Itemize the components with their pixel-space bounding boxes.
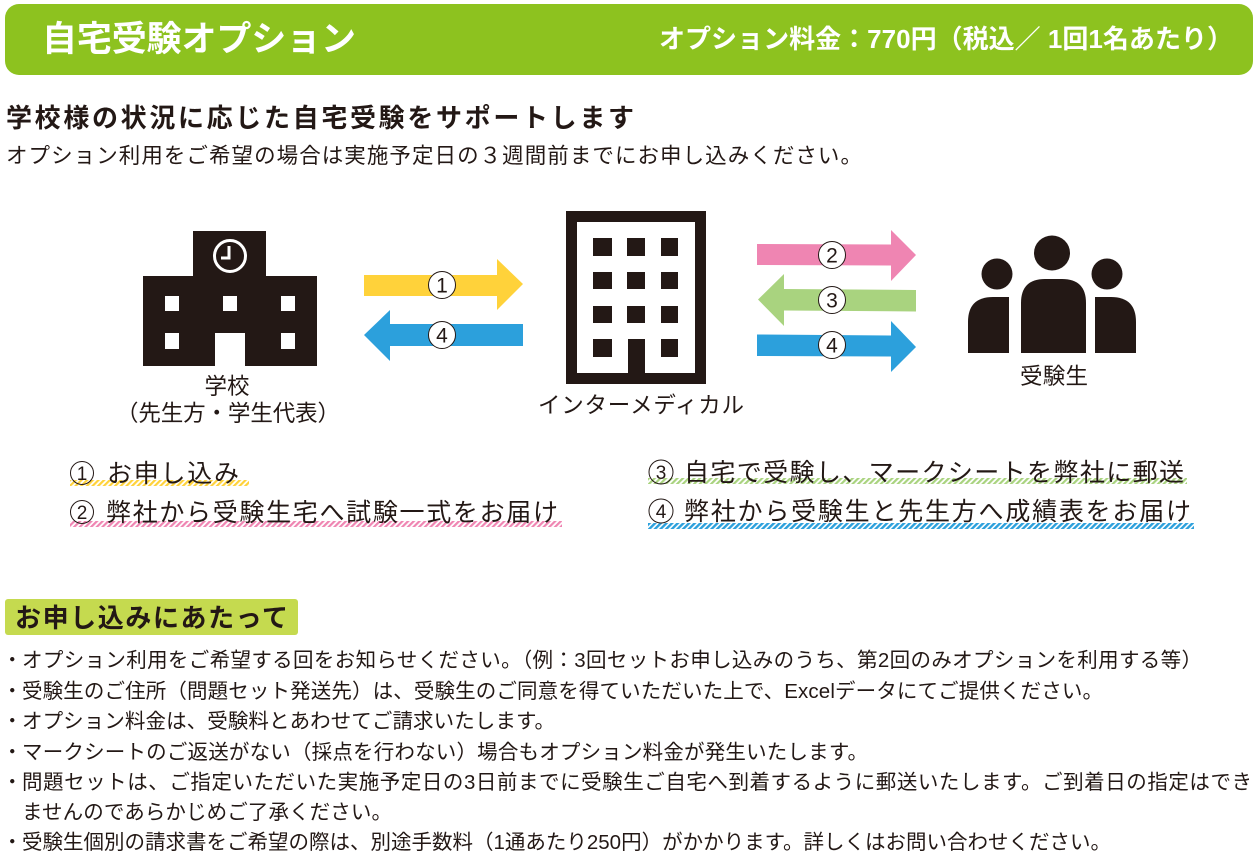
notes list: ・ — [2, 831, 22, 854]
notes list: ・ — [2, 741, 22, 764]
notes list — [2, 649, 1252, 854]
notes list: 受験生のご住所（問題セット発送先）は、受験生のご同意を得ていただいた上で、Excelデータにてご提供ください。 — [22, 680, 1103, 703]
arrow 4: Intermedical to examinees: 4 — [826, 334, 838, 358]
icon: Intermedical building — [566, 211, 706, 384]
legend: step 1: お申し込み — [107, 460, 239, 488]
notes list: ・ — [2, 649, 22, 672]
option fee: オプション料金：770円（税込／ 1回1名あたり） — [659, 24, 1233, 54]
legend: step 2: 弊社から受験生宅へ試験一式をお届け — [106, 499, 558, 527]
subheading: オプション利用をご希望の場合は実施予定日の３週間前までにお申し込みください。 — [6, 144, 862, 168]
section heading: application notes: お申し込みにあたって — [15, 603, 288, 633]
legend: step 1: 1 — [77, 464, 87, 485]
arrow 1: school to Intermedical — [364, 259, 523, 310]
label: teachers and student representative: （先生方・学生代表） — [116, 401, 340, 426]
notes list: ・ — [2, 680, 22, 703]
notes list: ・ — [2, 771, 22, 794]
arrow 4: Intermedical to examinees — [757, 321, 916, 372]
arrow 2: Intermedical to examinees — [757, 230, 916, 281]
arrow 4: Intermedical to school — [364, 310, 523, 361]
notes list: ・ — [2, 710, 22, 733]
legend: step 3: 3 — [656, 463, 666, 484]
arrow 4: Intermedical to school: 4 — [436, 324, 448, 348]
icon: school — [143, 231, 317, 366]
notes list: ませんのであらかじめご了承ください。 — [22, 801, 392, 824]
icon: examinees — [968, 236, 1136, 353]
arrow 3: examinees to Intermedical — [758, 274, 916, 326]
legend: step 4: 4 — [656, 502, 667, 523]
notes list: 問題セットは、ご指定いただいた実施予定日の3日前までに受験生ご自宅へ到着するように郵送いたします。ご到着日の指定はでき — [22, 771, 1252, 794]
arrow 2: Intermedical to examinees: 2 — [826, 244, 838, 268]
notes list: オプション料金は、受験料とあわせてご請求いたします。 — [22, 710, 555, 733]
label: Intermedical: インターメディカル — [538, 393, 744, 418]
header banner — [5, 4, 1253, 75]
label: school: 学校 — [204, 374, 250, 399]
notes list: マークシートのご返送がない（採点を行わない）場合もオプション料金が発生いたします。 — [22, 741, 868, 764]
title: 自宅受験オプション — [42, 20, 356, 59]
legend: step 2: 2 — [77, 503, 87, 524]
notes list: オプション利用をご希望する回をお知らせください。（例：3回セットお申し込みのうち、第2回のみオプションを利用する等） — [22, 649, 1202, 672]
heading: 学校様の状況に応じた自宅受験をサポートします — [6, 103, 634, 133]
arrow 1: school to Intermedical: 1 — [436, 274, 448, 298]
notes list: 受験生個別の請求書をご希望の際は、別途手数料（1通あたり250円）がかかります。詳しくはお問い合わせください。 — [22, 831, 1111, 854]
legend: step 4: 弊社から受験生と先生方へ成績表をお届け — [684, 498, 1191, 526]
arrow 3: examinees to Intermedical: 3 — [826, 290, 838, 312]
label: examinees: 受験生 — [1020, 364, 1088, 389]
legend: step 3: 自宅で受験し、マークシートを弊社に郵送 — [684, 459, 1184, 487]
